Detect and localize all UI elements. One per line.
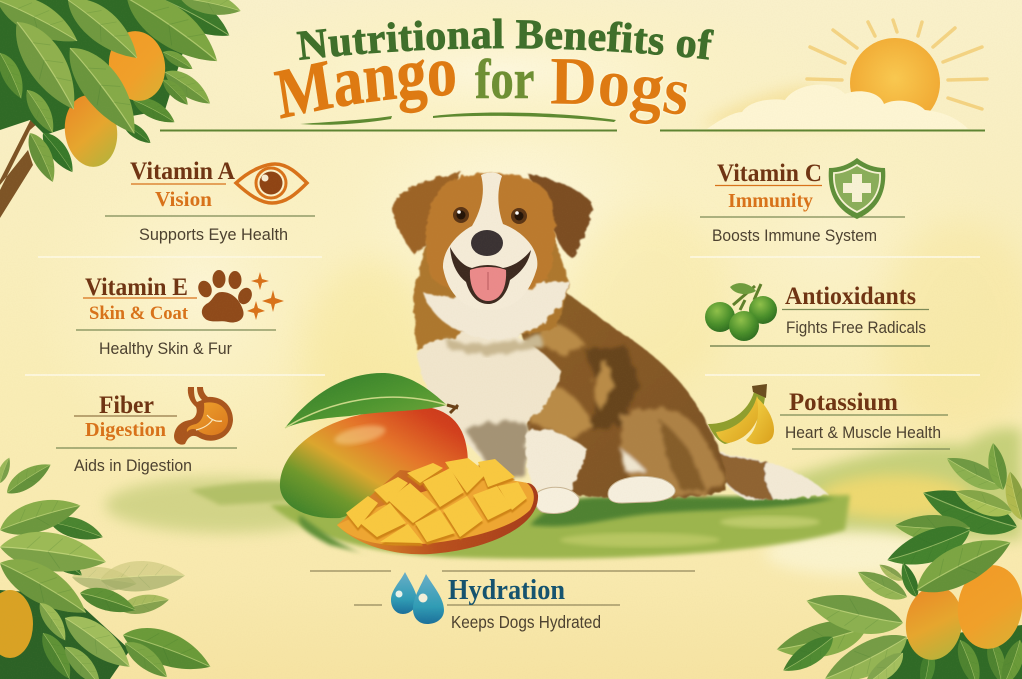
divider line bbox=[160, 130, 985, 132]
nose bbox=[471, 230, 503, 256]
blaze and muzzle bbox=[443, 172, 537, 310]
description: Healthy Skin & Fur bbox=[99, 339, 232, 358]
title bbox=[274, 18, 714, 126]
panel: vitamin e bbox=[76, 270, 284, 358]
heading: Antioxidants bbox=[785, 283, 916, 310]
subheading: Digestion bbox=[85, 419, 166, 441]
front paw bbox=[535, 487, 579, 513]
mango fruit bbox=[60, 92, 122, 170]
cloud bbox=[707, 85, 968, 129]
dog bbox=[393, 172, 828, 513]
icon: eye bbox=[236, 164, 307, 203]
whole mango bbox=[280, 373, 468, 518]
mango fruit bbox=[901, 582, 967, 664]
panel: fiber bbox=[56, 387, 237, 475]
sun bbox=[700, 20, 987, 129]
heading: Potassium bbox=[789, 389, 898, 416]
description: Aids in Digestion bbox=[74, 456, 192, 475]
heading: Fiber bbox=[99, 392, 154, 419]
description: Keeps Dogs Hydrated bbox=[451, 612, 601, 632]
subheading: Vision bbox=[155, 187, 212, 211]
title word: Dogs: Dogs bbox=[550, 59, 688, 126]
icon: water drops bbox=[391, 572, 444, 624]
heading: Vitamin E bbox=[85, 274, 188, 301]
cut mango bbox=[337, 458, 538, 554]
body bbox=[520, 285, 727, 498]
mango fruit bbox=[0, 590, 33, 658]
icon: paw with sparkles bbox=[196, 270, 284, 322]
icon: bananas bbox=[708, 384, 774, 444]
neck and chest bbox=[413, 225, 570, 478]
title word: Mango bbox=[274, 59, 455, 119]
title word: Mango: Mango bbox=[274, 59, 455, 119]
panel: hydration bbox=[310, 571, 695, 632]
panel: vitamin c bbox=[700, 158, 905, 245]
heading: Hydration bbox=[448, 575, 565, 606]
heading: Vitamin A bbox=[130, 158, 235, 185]
grass ground bbox=[105, 477, 850, 562]
tongue bbox=[470, 267, 506, 301]
description: Heart & Muscle Health bbox=[785, 423, 941, 442]
icon: stomach bbox=[174, 387, 233, 445]
title word: for: for bbox=[475, 49, 534, 111]
left tree bbox=[0, 0, 243, 218]
description: Supports Eye Health bbox=[139, 225, 288, 244]
icon: green berries bbox=[705, 283, 777, 341]
mouth bbox=[450, 247, 531, 304]
panel: potassium bbox=[708, 384, 950, 449]
right hill bbox=[765, 428, 1022, 575]
subheading: Immunity bbox=[728, 190, 813, 212]
icon: shield bbox=[829, 158, 885, 219]
tail bbox=[717, 452, 828, 500]
leaf bbox=[285, 373, 447, 428]
bottom left foliage bbox=[0, 456, 217, 679]
description: Boosts Immune System bbox=[712, 226, 877, 245]
panel: vitamin a bbox=[105, 158, 315, 244]
heading: Vitamin C bbox=[717, 160, 822, 187]
right eye bbox=[511, 208, 527, 224]
ears bbox=[393, 172, 592, 258]
front leg bbox=[526, 429, 588, 490]
bottom right foliage bbox=[773, 441, 1022, 679]
left eye bbox=[453, 207, 469, 223]
trunk bbox=[0, 100, 60, 218]
panel: antioxidants bbox=[705, 283, 930, 346]
title line 1: Nutritional Benefits of bbox=[296, 18, 714, 60]
mango fruit bbox=[104, 27, 170, 105]
head bbox=[426, 172, 555, 310]
mango fruit bbox=[952, 561, 1022, 653]
description: Fights Free Radicals bbox=[786, 318, 926, 337]
subheading: Skin & Coat bbox=[89, 303, 189, 324]
hind paw bbox=[608, 476, 675, 503]
